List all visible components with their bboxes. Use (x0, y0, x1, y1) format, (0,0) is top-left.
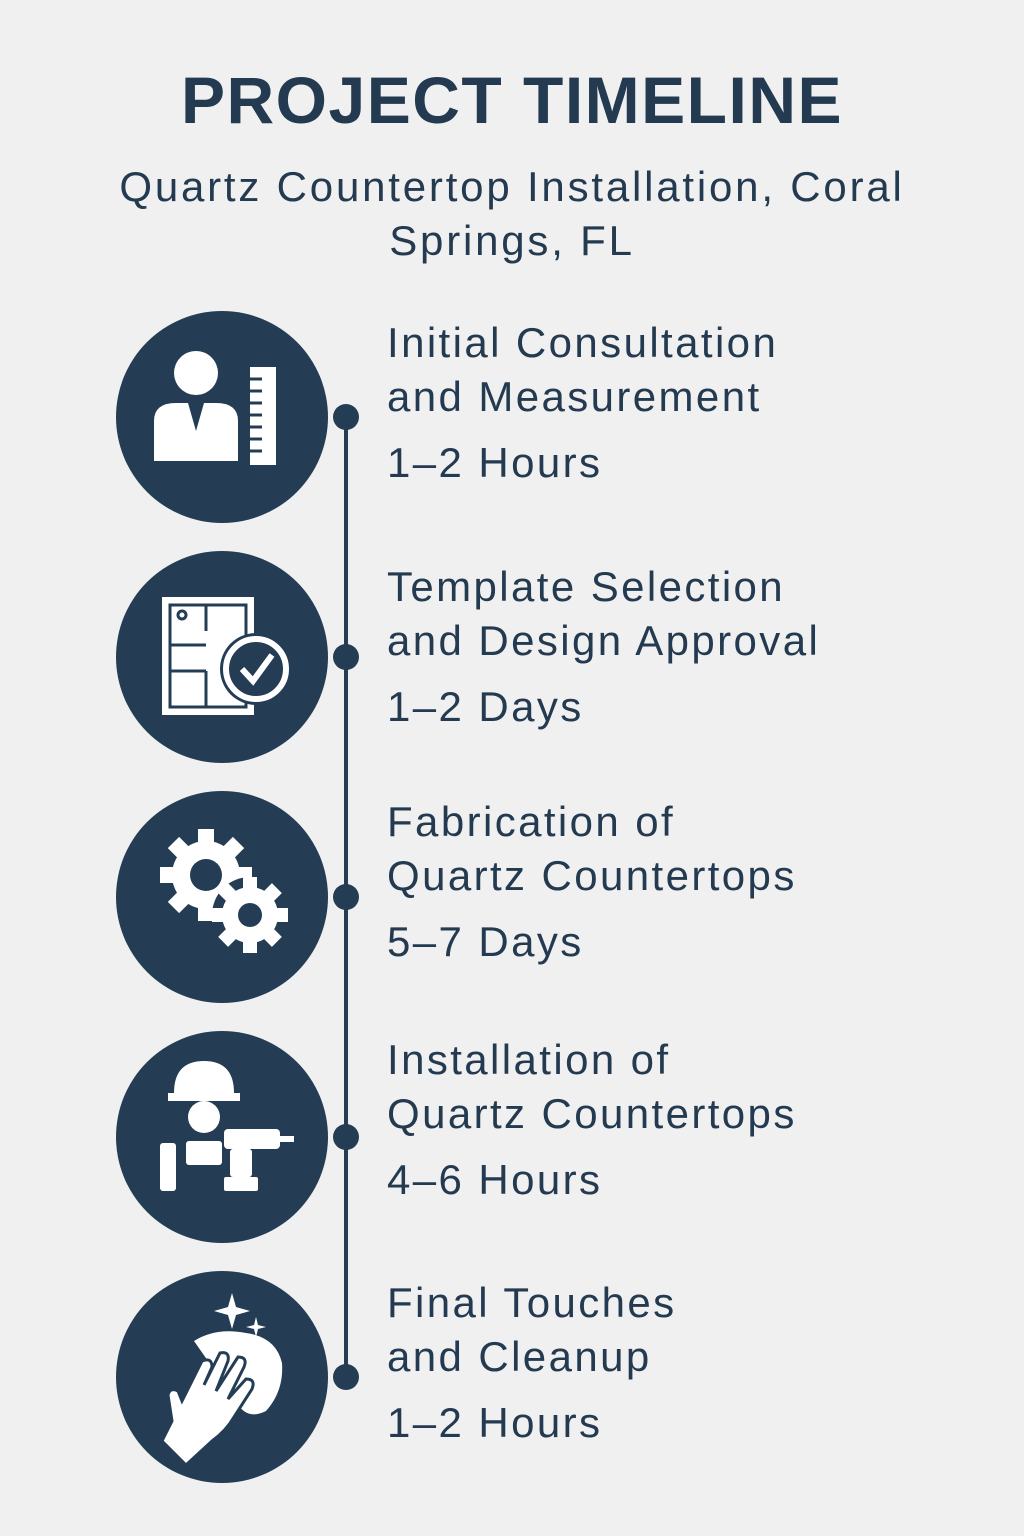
icon: hand with cloth (116, 1271, 328, 1483)
text: step 3 (387, 798, 797, 965)
timeline line (344, 417, 348, 1377)
subtitle (119, 163, 905, 264)
text: step 1: Initial Consultation (387, 319, 778, 366)
text: step 5: 1–2 Hours (387, 1399, 602, 1446)
text: step 1 (387, 319, 778, 486)
subtitle: Springs, FL (389, 217, 635, 264)
text: step 3: 5–7 Days (387, 918, 584, 965)
text: step 2: Template Selection (387, 563, 785, 610)
text: step 5: Final Touches (387, 1279, 677, 1326)
icon: gears (116, 791, 328, 1003)
step 5 (116, 1271, 677, 1483)
text: step 2 (387, 563, 820, 730)
text: step 2: 1–2 Days (387, 683, 584, 730)
icon: blueprint with check (116, 551, 328, 763)
text: step 5: and Cleanup (387, 1333, 652, 1380)
step 3 (116, 791, 797, 1003)
step 2 (116, 551, 820, 763)
step 4 (116, 1031, 797, 1243)
text: step 4 (387, 1036, 797, 1203)
subtitle: Quartz Countertop Installation, Coral (119, 163, 905, 210)
text: step 5 (387, 1279, 677, 1446)
text: step 4: 4–6 Hours (387, 1156, 602, 1203)
text: step 4: Installation of (387, 1036, 670, 1083)
text: step 4: Quartz Countertops (387, 1090, 797, 1137)
text: step 1: 1–2 Hours (387, 439, 602, 486)
icon: worker with drill (116, 1031, 328, 1243)
icon: person with ruler (116, 311, 328, 523)
text: step 2: and Design Approval (387, 617, 820, 664)
text: step 3: Quartz Countertops (387, 852, 797, 899)
text: step 3: Fabrication of (387, 798, 675, 845)
title: PROJECT TIMELINE (181, 63, 843, 137)
text: step 1: and Measurement (387, 373, 762, 420)
step 1 (116, 311, 778, 523)
